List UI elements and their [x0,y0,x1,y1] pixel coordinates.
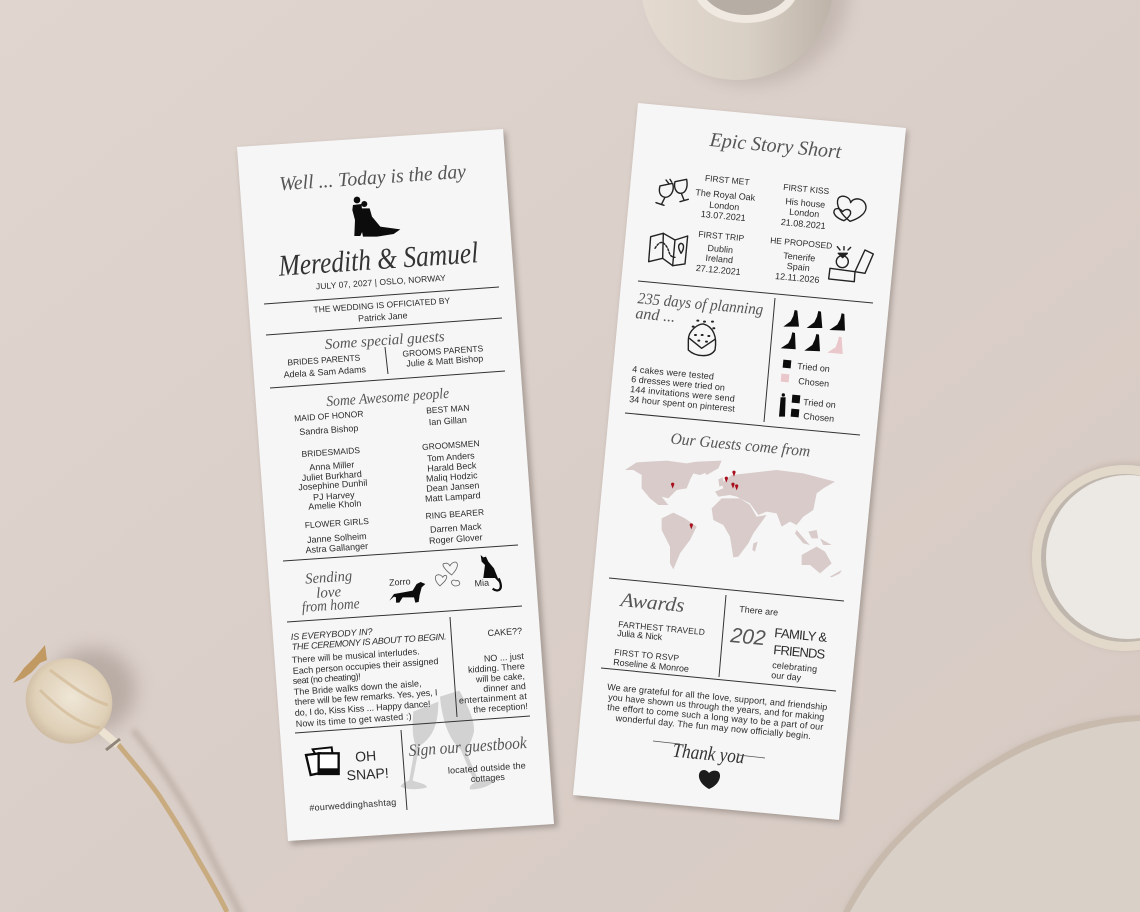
oh snap and hashtag [309,747,397,813]
bridal party right column: Roger Glover [429,532,483,546]
ceremony text block: IS EVERYBODY IN? [290,626,373,642]
bridal party left column: PJ Harvey [313,490,355,502]
guest count block: FRIENDS [773,642,826,662]
he proposed [770,235,833,285]
awards block: FARTHEST TRAVELD [618,619,705,637]
thank you message: wonderful day. The fun may now officially begin. [614,713,811,741]
thank you signature: Thank you [672,740,745,768]
cake text block: kidding. There [468,661,525,675]
bridal party right column: Ian Gillan [428,415,467,427]
cake text block: CAKE?? [487,626,522,638]
ceremony text block: There will be musical interludes. [291,646,420,665]
cake text block [459,626,528,715]
bridal party right column: Maliq Hodzic [426,470,478,484]
first trip: FIRST TRIP [698,229,745,243]
special guests block: Some special guests [324,329,445,353]
oh snap and hashtag: OH [355,747,377,765]
planning heading: 235 days of planning [637,290,764,319]
oh snap and hashtag: #ourweddinghashtag [309,797,397,813]
cake text block: entertainment at [459,691,528,706]
icon: ring box [829,247,873,282]
bridal party left column: Juliet Burkhard [302,469,362,483]
planning stats [629,364,736,414]
bridal party left column: Josephine Dunhil [298,478,368,492]
guest count block: FAMILY & [774,625,828,645]
champagne flutes watermark [401,691,493,789]
bridal party left column: BRIDESMAIDS [301,445,361,459]
guestbook block: cottages [470,772,506,784]
pets: dog, hearts and cat [389,555,501,603]
ceremony text block: Now its time to get wasted :) [295,711,412,729]
thank you message [607,682,828,741]
ceremony text block: THE CEREMONY IS ABOUT TO BEGIN. [291,631,447,652]
planning heading: and ... [635,305,676,326]
icon: envelope with hearts [688,321,716,356]
thank you message: you have shown us through the years, and for making [608,692,825,722]
first met: 13.07.2021 [700,209,746,223]
sending love from home [301,568,361,616]
cake text block: NO ... just [484,651,525,664]
icon: black heart [699,770,720,789]
bridal party right column: Tom Anders [427,450,475,464]
guest count block [729,604,828,683]
bridal party right column: Dean Jansen [426,480,480,494]
awards block: Julia & Nick [617,628,663,642]
special guests block: BRIDES PARENTS [287,353,361,367]
map pins [671,471,738,529]
ceremony text block: there will be few remarks. Yes, yes, I [294,687,438,707]
pets: dog, hearts and cat: Mia [474,578,489,588]
he proposed: 12.11.2026 [775,271,820,285]
special guests block [283,329,484,380]
first met: London [709,200,740,212]
cake text block: the reception! [473,701,528,715]
planning stats: 34 hour spent on pinterest [629,394,736,414]
awards block: Roseline & Monroe [613,657,689,674]
bridal party left column: Sandra Bishop [299,423,359,437]
ceremony text block: The Bride walks down the aisle, [293,678,422,697]
bridal party left column: FLOWER GIRLS [304,516,370,530]
first met: FIRST MET [705,173,750,187]
sending love from home: Sending [305,568,353,588]
sending love from home: love [316,584,342,602]
map land [625,461,842,577]
awards block [613,589,705,674]
bridal party left column [294,409,370,555]
dresses pictogram [781,310,845,354]
icon: folded map [649,233,688,266]
heading: Epic Story Short: Epic Story Short [708,129,843,163]
special guests block: Julie & Matt Bishop [406,353,484,369]
bridal party left column: Janne Solheim [307,531,367,545]
guestbook block: Sign our guestbook [408,733,528,760]
first kiss: FIRST KISS [783,182,830,196]
first trip: Dublin [707,243,733,255]
dress legend: Tried on [797,361,830,374]
pets: dog, hearts and cat: Zorro [389,576,411,588]
guestbook block: located outside the [448,760,526,776]
oh snap and hashtag: SNAP! [346,765,389,783]
card sheet left [237,129,554,841]
bridal party left column: Amelie Kholn [308,498,362,512]
bridal party left column: Astra Gallanger [305,541,368,555]
guest count block: 202 [729,624,767,650]
icon: instant photos [306,747,339,775]
bridal party right column: BEST MAN [426,403,470,415]
guests heading: Our Guests come from [670,431,811,460]
ceremony text block: seat (no cheating)! [292,671,361,686]
heading: Well today is the day: Well ... Today is the day [279,161,467,195]
card sheet right [573,103,906,820]
first kiss: 21.08.2021 [780,217,826,231]
planning stats: 144 invitations were send [630,384,735,404]
groom legend: Tried on [803,397,836,410]
bridal party right column: Darren Mack [430,521,482,535]
officiant block [313,295,451,324]
bridal party right column: Harald Beck [427,460,477,474]
cake text block: will be cake, [475,671,525,684]
first met: The Royal Oak [695,187,756,203]
dress legend: Chosen [798,376,830,389]
date and place: JULY 07, 2027 | OSLO, NORWAY [316,273,446,291]
first kiss: London [789,207,820,219]
icon: couple silhouette [352,197,400,237]
right card: story infographic [573,103,908,823]
groom legend: Chosen [803,411,835,424]
bridal party right column: Matt Lampard [425,490,481,504]
bridal party right column: RING BEARER [425,507,484,521]
first met [695,173,756,223]
cake text block: dinner and [483,681,526,694]
guest count block: celebrating [772,660,818,674]
bridal party right column: GROOMSMEN [422,438,480,452]
first trip: 27.12.2021 [695,263,741,277]
first kiss: His house [785,196,826,210]
sending love from home: from home [301,596,361,616]
dried poppy seed pod [9,641,242,912]
left card: wedding programme [237,129,558,845]
icon: clinking glasses [656,179,688,205]
guest count block: our day [771,670,802,683]
dress legend [781,360,830,389]
heading: couple names: Meredith & Samuel [277,236,479,283]
he proposed: HE PROPOSED [770,235,833,251]
thank you message: We are grateful for all the love, support, and friendship [607,682,828,712]
bridal party left column: Anna Miller [309,459,355,473]
first kiss [780,182,830,231]
planning stats: 6 dresses were tried on [631,374,725,393]
special guests block: Adela & Sam Adams [283,364,367,380]
icon: two hearts [834,196,866,221]
bridal party right column [422,403,484,546]
awards block: Awards [618,589,686,617]
planning stats: 4 cakes were tested [632,364,714,382]
officiant block: THE WEDDING IS OFFICIATED BY [313,295,451,315]
groom legend [779,393,836,424]
world map with pins [625,461,842,577]
guest count block: There are [739,604,779,618]
first trip [695,229,745,277]
he proposed: Spain [786,261,810,273]
ceremony text block: do, I do, Kiss Kiss ... Happy dance! [294,699,431,718]
awards block: FIRST TO RSVP [614,647,680,663]
round white dish at right [1032,462,1140,651]
ceremony text block [290,626,447,729]
awesome people heading: Some Awesome people [326,386,450,410]
special guests block: GROOMS PARENTS [402,343,484,359]
guestbook block [408,733,528,784]
large plate at bottom right [843,715,1140,912]
thank you message: the effort to come such a long way to be a part of our [607,702,824,732]
he proposed: Tenerife [783,251,816,263]
first trip: Ireland [705,253,733,265]
officiant block: Patrick Jane [358,310,408,324]
ceramic cup at top [641,0,848,84]
ceremony text block: Each person occupies their assigned [292,656,439,676]
bridal party left column: MAID OF HONOR [294,409,364,423]
